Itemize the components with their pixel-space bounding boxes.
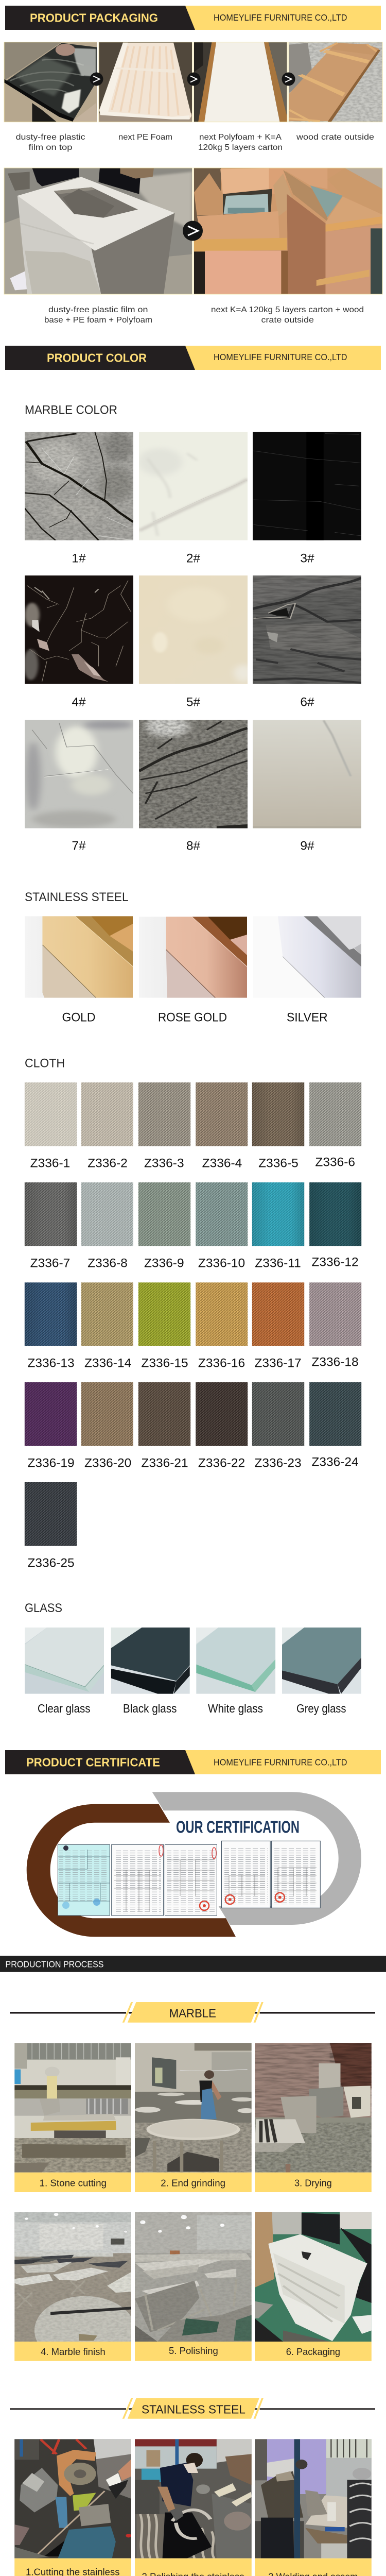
banner: product certificate [5,1750,381,1774]
caption: carton and crate: next K=A 120kg 5 layers carton + wood [211,306,364,314]
swatch 7# [25,720,133,828]
step 1 stone cutting [14,2043,131,2173]
cloth row 3 swatches [25,1282,361,1346]
marble labels: 8# [186,839,200,853]
photo: cartons in wood crates [194,168,382,294]
arrow: step 1 to 2 [90,72,103,86]
steel labels: SILVER [287,1011,328,1025]
caption bands row 1: 3. Drying [294,2178,332,2188]
glass labels: Clear glass [38,1702,91,1715]
arrow: step 2 to 3 [187,72,201,86]
caption: film on base [44,306,152,325]
step 6 packaging [255,2212,372,2342]
cloth labels: Z336-2 [87,1156,128,1170]
panel: glass swatches [25,1628,361,1694]
banner: product color [5,346,381,370]
marble labels: 6# [300,696,314,709]
banner: product certificate: HOMEYLIFE FURNITURE CO.,LTD [214,1757,347,1768]
glass labels [38,1702,346,1715]
caption: film on top [16,133,85,152]
heading: cloth: CLOTH [25,1057,65,1071]
banner: product certificate: PRODUCT CERTIFICATE [26,1756,160,1769]
cloth labels: Z336-7 [30,1256,70,1270]
caption: film on top: dusty-free plastic [16,133,85,142]
arrow: large step arrow [183,221,203,241]
swatch: rose gold [139,917,247,998]
marble labels: 4# [72,696,86,709]
swatch: silver [253,916,361,998]
decorative grey arc [152,1792,361,1925]
bar: production process: PRODUCTION PROCESS [5,1959,104,1970]
certificate 4 [221,1841,270,1908]
step 4 marble finish [14,2212,135,2365]
steel labels: ROSE GOLD [158,1011,227,1025]
cloth labels: Z336-22 [198,1456,245,1470]
cloth labels: Z336-8 [87,1256,128,1270]
certificate 2 [112,1844,164,1916]
banner: product packaging: HOMEYLIFE FURNITURE CO.,LTD [214,12,347,23]
panel: certification [27,1792,361,1937]
swatch 8# [139,716,248,828]
cloth row 4 swatches [25,1382,361,1446]
step 5 polishing [135,2212,252,2342]
cloth labels: Z336-14 [84,1356,131,1370]
cloth labels: Z336-20 [84,1456,131,1470]
swatch 1# [25,431,133,540]
cloth labels: Z336-24 [311,1455,359,1469]
caption: carton and crate [211,306,364,325]
cloth labels: Z336-6 [315,1155,355,1169]
swatch 5# [139,575,253,684]
cloth labels: Z336-13 [27,1356,75,1370]
cloth labels: Z336-23 [254,1456,302,1470]
panel: marble swatches [24,431,361,828]
cloth labels: Z336-11 [255,1256,301,1270]
cloth labels: Z336-4 [202,1156,242,1170]
certificate 1 [58,1844,110,1916]
caption bands row 2: 4. Marble finish [41,2347,106,2357]
cloth row 2 swatches [25,1182,361,1246]
glass labels: White glass [208,1702,263,1715]
swatch 3# [253,432,361,540]
caption bands row 2 [14,2342,372,2361]
banner: product color: PRODUCT COLOR [47,351,147,365]
marble labels: 1# [72,552,86,566]
caption bands row 3 [14,2558,372,2576]
cloth labels: Z336-19 [27,1456,75,1470]
certification title: OUR CERTIFICATION [176,1818,300,1837]
caption: polyfoam and carton: next Polyfoam + K=A [199,133,282,142]
photo: PE foam [99,42,192,122]
cloth labels: Z336-15 [141,1356,188,1370]
cloth labels: Z336-25 [27,1556,75,1570]
heading: glass: GLASS [25,1601,62,1615]
cloth labels: Z336-21 [141,1456,188,1470]
heading: stainless steel: STAINLESS STEEL [25,890,129,904]
swatch: grey glass [282,1628,361,1694]
swatch 9# [253,720,361,828]
step 1 cutting [14,2439,131,2558]
caption: PE foam: next PE Foam [118,133,172,142]
cloth labels: Z336-3 [144,1156,184,1170]
marble labels [72,552,314,853]
photo: marble top with plastic film [4,42,97,122]
caption bands row 1 [14,2173,372,2192]
caption: carton and crate: crate outside [261,316,314,325]
swatch 4# [24,575,133,684]
panel: stainless steel finishes [25,916,361,998]
marble labels: 9# [300,839,314,853]
photo: polyfoam in carton [194,42,287,122]
cloth labels: Z336-16 [198,1356,245,1370]
cloth row 1 swatches [25,1082,361,1146]
caption: film on base: dusty-free plastic film on [48,306,148,314]
glass labels: Black glass [123,1702,177,1715]
decorative brown arc [27,1804,236,1937]
panel: packaging step photos [4,42,382,122]
cloth labels: Z336-12 [311,1255,359,1269]
panel: cloth swatches [25,1082,361,1570]
bar: production process [0,1956,386,1972]
swatch: white glass [196,1628,275,1694]
banner: product color: HOMEYLIFE FURNITURE CO.,LTD [214,352,347,362]
cloth labels: Z336-1 [30,1156,70,1170]
cloth labels: Z336-18 [311,1355,359,1369]
marble labels: 7# [72,839,86,853]
marble labels: 2# [186,552,200,566]
photo: wrapped marble base [4,168,192,294]
caption bands row 1: 1. Stone cutting [39,2178,107,2188]
cloth labels: Z336-10 [198,1256,245,1270]
caption bands row 1: 2. End grinding [161,2178,225,2188]
marble labels: 5# [186,696,200,709]
cloth labels: Z336-5 [258,1156,299,1170]
swatch: gold [25,916,133,998]
caption: wood crate: wood crate outside [296,133,374,142]
arrow: step 3 to 4 [282,72,295,86]
cloth labels [27,1155,359,1570]
subheading: stainless steel ribbon: STAINLESS STEEL [142,2403,245,2416]
caption bands row 2: 6. Packaging [286,2347,340,2357]
certificate 3 [165,1844,217,1916]
certificate 5 [272,1841,320,1908]
subheading: marble ribbon [10,2002,375,2023]
steel labels [62,1011,328,1025]
subheading: stainless steel ribbon [10,2398,375,2419]
cloth row 5 swatch [25,1482,77,1546]
banner: product packaging [5,6,381,30]
swatch 2# [138,432,248,540]
swatch: black glass [111,1628,190,1694]
marble labels: 3# [300,552,314,566]
caption: film on base: base + PE foam + Polyfoam [44,316,152,325]
cloth labels: Z336-17 [254,1356,302,1370]
panel: stainless steel process steps [14,2439,372,2576]
swatch 6# [253,575,361,684]
heading: marble color: MARBLE COLOR [25,403,117,417]
caption: polyfoam and carton [198,133,283,152]
glass labels: Grey glass [296,1702,346,1715]
step 3 drying [255,2043,372,2173]
cloth labels: Z336-9 [144,1256,184,1270]
photo: wood crate [289,42,382,122]
swatch: clear glass [25,1628,104,1694]
caption: film on top: film on top [29,143,73,152]
step 2 polishing [135,2439,252,2558]
step 3 welding [255,2439,372,2560]
banner: product packaging: PRODUCT PACKAGING [30,11,158,25]
steel labels: GOLD [62,1011,96,1025]
caption bands row 2: 5. Polishing [169,2346,218,2356]
caption: polyfoam and carton: 120kg 5 layers carton [198,143,283,152]
panel: marble process steps [14,2043,372,2365]
step 2 end grinding [135,2043,255,2173]
subheading: marble ribbon: MARBLE [169,2006,216,2020]
